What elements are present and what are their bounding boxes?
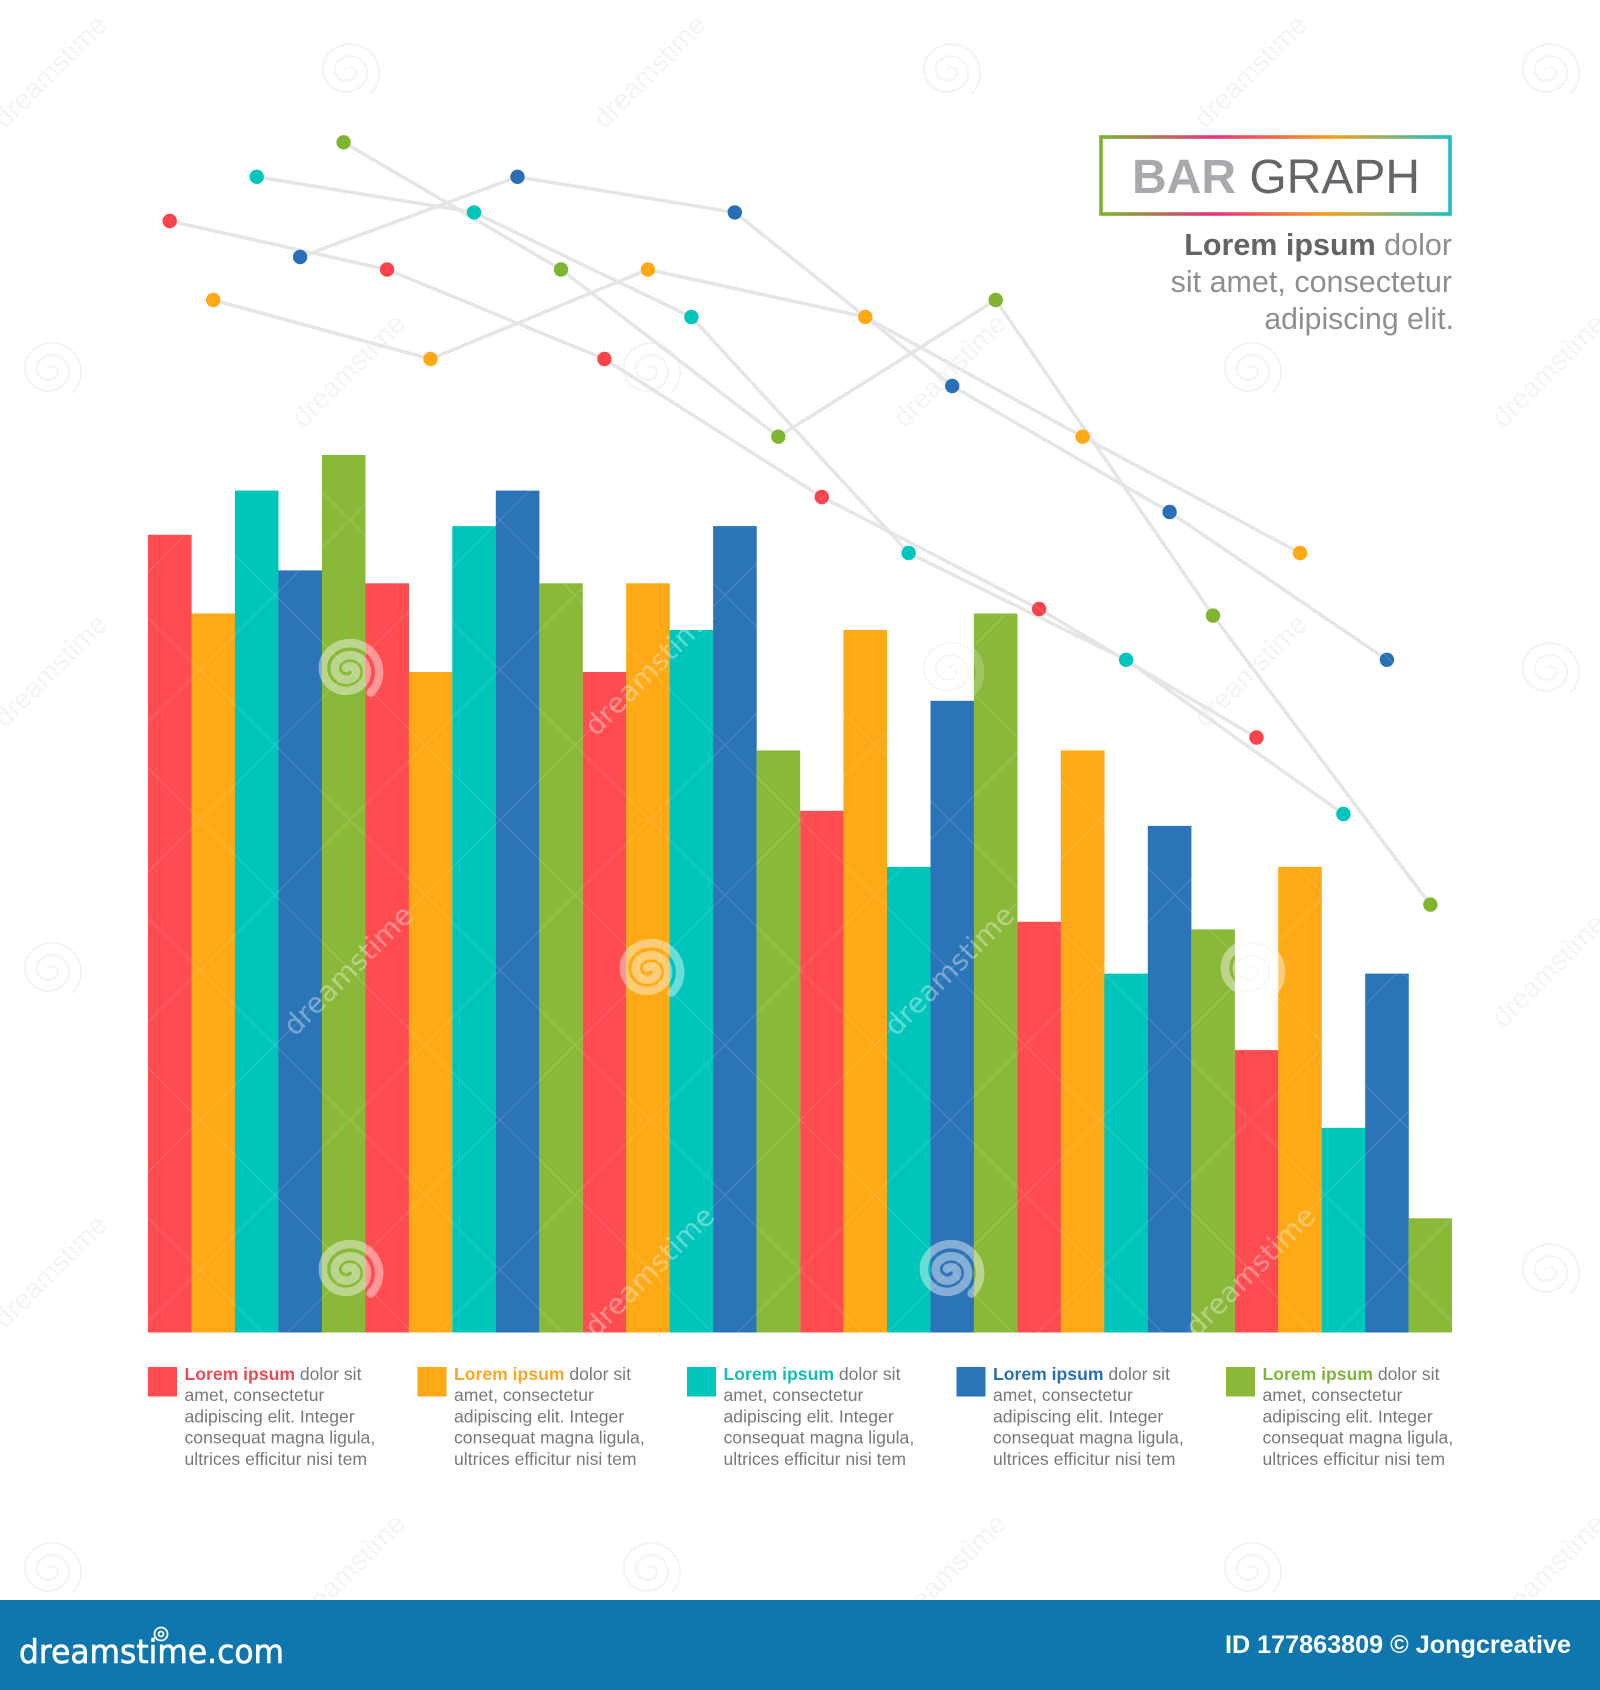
legend item: orange: adipiscing elit. Integer	[454, 1406, 624, 1426]
line: blue series	[300, 177, 1387, 660]
watermark over bars: dreamstime	[277, 899, 420, 1042]
line: teal series	[257, 177, 1343, 814]
legend item: teal: ultrices efficitur nisi tem	[724, 1449, 906, 1469]
legend item: red: adipiscing elit. Integer	[184, 1406, 355, 1426]
legend item: orange: consequat magna ligula,	[454, 1428, 645, 1448]
legend item: blue	[956, 1364, 1184, 1469]
watermark on white background: dreamstime	[1188, 9, 1313, 134]
subtitle text block: adipiscing elit.	[1264, 303, 1454, 336]
dots: teal series	[250, 170, 1351, 821]
title box	[1101, 137, 1450, 214]
watermark over bars: dreamstime	[1179, 1200, 1322, 1343]
connector lines chart	[170, 142, 1430, 905]
legend item: teal: adipiscing elit. Integer	[724, 1406, 894, 1426]
watermark over bars	[148, 455, 1452, 1343]
legend item: green: Lorem ipsum dolor sit	[1262, 1364, 1440, 1384]
legend item: blue: consequat magna ligula,	[993, 1428, 1184, 1448]
legend item: green: ultrices efficitur nisi tem	[1262, 1449, 1445, 1469]
footer logo text: dreamstime.com	[19, 1632, 284, 1671]
bars: blue series	[278, 491, 1409, 1333]
legend item: green	[1226, 1364, 1453, 1469]
legend item: blue: amet, consectetur	[993, 1385, 1133, 1405]
line: orange series	[213, 270, 1300, 553]
footer band	[0, 1600, 1600, 1690]
title text: BAR GRAPH	[1132, 151, 1420, 204]
legend item: green: consequat magna ligula,	[1262, 1428, 1453, 1448]
bars: teal series	[235, 491, 1365, 1333]
watermark on white background: dreamstime	[286, 1508, 411, 1633]
dots: blue series	[293, 170, 1394, 667]
legend item: red: amet, consectetur	[184, 1385, 324, 1405]
legend item: teal: Lorem ipsum dolor sit	[724, 1364, 901, 1384]
dots: green series	[336, 135, 1438, 912]
legend item: red: ultrices efficitur nisi tem	[184, 1449, 367, 1469]
legend item: blue: adipiscing elit. Integer	[993, 1406, 1163, 1426]
line: green series	[344, 142, 1430, 905]
watermark over bars: dreamstime	[578, 1200, 721, 1343]
subtitle text block	[1171, 228, 1454, 336]
legend item: blue: ultrices efficitur nisi tem	[993, 1449, 1176, 1469]
legend	[148, 1364, 1453, 1469]
watermark on white background: dreamstime	[887, 1508, 1012, 1633]
legend item: red: Lorem ipsum dolor sit	[184, 1364, 362, 1384]
legend item: green: amet, consectetur	[1262, 1385, 1402, 1405]
watermark over bars: dreamstime	[878, 899, 1021, 1042]
watermark on white background: dreamstime	[587, 9, 712, 134]
watermark on white background: dreamstime	[1188, 608, 1313, 733]
legend item: orange	[418, 1364, 645, 1469]
legend item: green: adipiscing elit. Integer	[1262, 1406, 1433, 1426]
legend item: orange: Lorem ipsum dolor sit	[454, 1364, 631, 1384]
bar chart	[148, 455, 1452, 1332]
legend item: teal	[687, 1364, 914, 1469]
subtitle text block: Lorem ipsum dolor	[1184, 228, 1452, 262]
subtitle text block: sit amet, consectetur	[1171, 265, 1452, 299]
bars: green series	[322, 455, 1452, 1332]
legend item: teal: consequat magna ligula,	[724, 1428, 914, 1448]
legend item: red	[148, 1364, 375, 1469]
watermark on white background: dreamstime	[286, 308, 411, 433]
legend item: teal: amet, consectetur	[724, 1385, 863, 1405]
bars: orange series	[192, 583, 1322, 1332]
watermark over bars: dreamstime	[578, 599, 721, 742]
dots: red series	[162, 214, 1264, 745]
line: red series	[170, 221, 1257, 738]
legend item: orange: amet, consectetur	[454, 1385, 594, 1405]
footer logo mark	[154, 1628, 168, 1640]
bars: red series	[148, 535, 1278, 1332]
legend item: blue: Lorem ipsum dolor sit	[993, 1364, 1170, 1384]
legend item: red: consequat magna ligula,	[184, 1428, 375, 1448]
watermark on white background: dreamstime	[887, 308, 1012, 433]
legend item: orange: ultrices efficitur nisi tem	[454, 1449, 637, 1469]
dots: orange series	[206, 262, 1307, 560]
footer credit text: ID 177863809 © Jongcreative	[1225, 1631, 1571, 1659]
